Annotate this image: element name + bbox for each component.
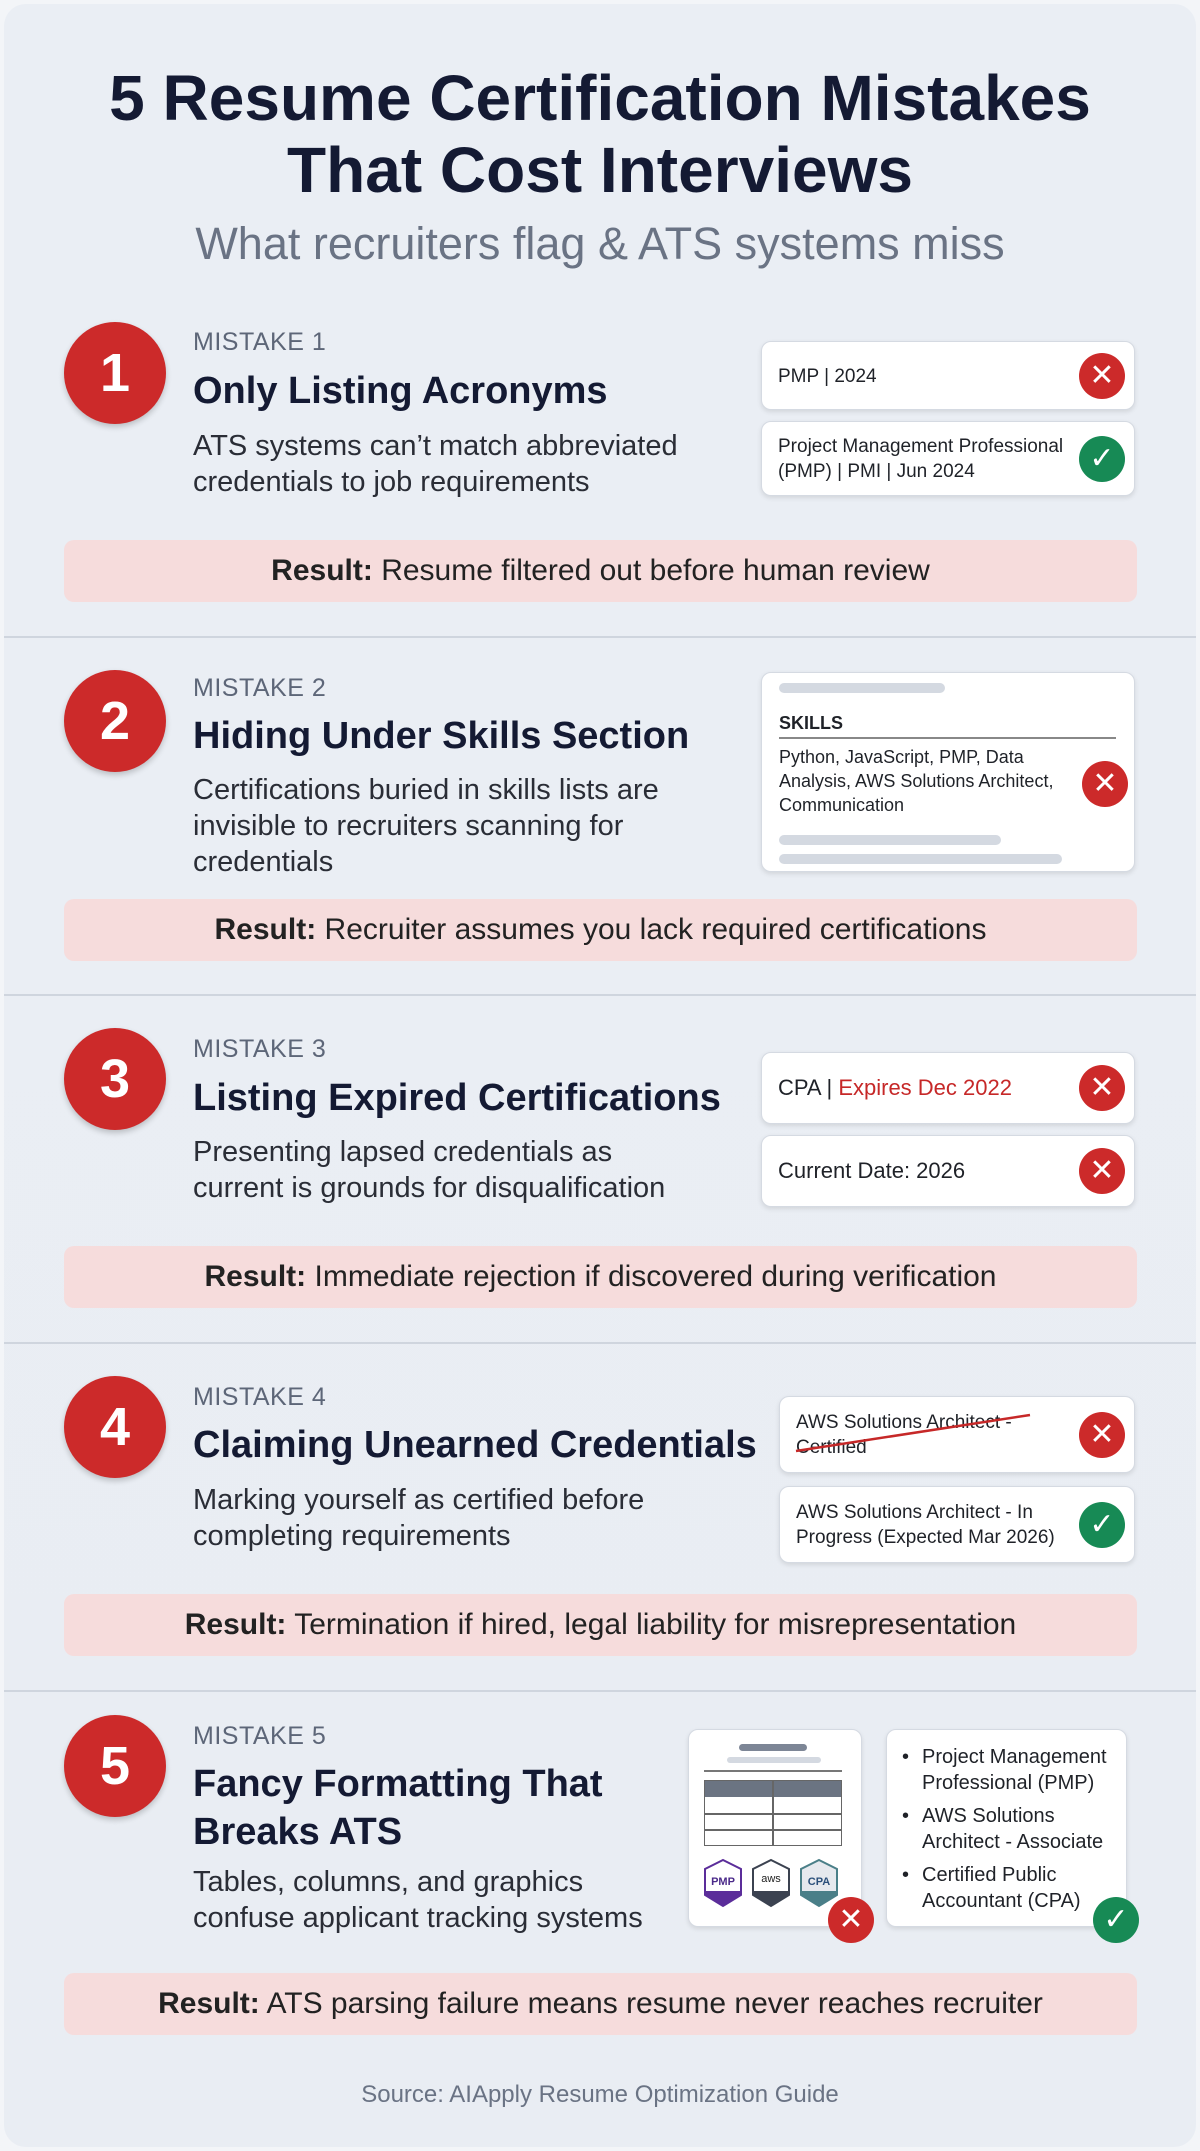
card: fancy table resume [688,1729,862,1927]
result bar [64,1973,1137,2035]
heading: Claiming Unearned Credentials [193,1424,757,1466]
card: clean list: AWS Solutions [922,1805,1055,1827]
card: struck credential: AWS Solutions Architect - [796,1412,1012,1433]
result bar: Result: Resume filtered out before human review [271,554,930,587]
source footer: Source: AIApply Resume Optimization Guide [361,2081,839,2108]
card: clean list: • [902,1746,909,1768]
card: expired: CPA | Expires Dec 2022 [778,1075,1012,1100]
description: confuse applicant tracking systems [193,1902,643,1934]
number badge 3: 3 [100,1049,130,1109]
description: Marking yourself as certified before [193,1484,644,1516]
heading: Only Listing Acronyms [193,370,608,412]
title: 5 Resume Certification Mistakes [109,62,1091,134]
card: struck credential [779,1396,1135,1473]
number badge 2 [64,670,166,772]
panel: mistake 2 [62,670,1137,961]
number badge 3 [64,1028,166,1130]
heading: Hiding Under Skills Section [193,715,689,757]
card: in progress: AWS Solutions Architect - In [796,1502,1033,1523]
result bar [64,1594,1137,1656]
card: current date: ✕ [1089,1154,1115,1187]
number badge 1 [64,322,166,424]
icon: badges [704,1858,838,1908]
description: ATS systems can’t match abbreviated [193,430,678,462]
card: expired [761,1052,1135,1124]
description: Tables, columns, and graphics [193,1866,583,1898]
result bar: Result: Immediate rejection if discovered during verification [204,1260,996,1293]
description [193,430,678,498]
heading: Listing Expired Certifications [193,1077,721,1119]
icon: x: ✕ [838,1903,864,1936]
card: current date: Current Date: 2026 [778,1158,965,1183]
description [193,1484,644,1552]
title: That Cost Interviews [287,134,913,206]
result bar [64,540,1137,602]
card: skills section: SKILLS [779,713,843,733]
icon: check [1093,1897,1139,1943]
description: credentials to job requirements [193,466,590,498]
card: struck credential: ✕ [1089,1418,1115,1451]
card: struck credential: Certified [796,1437,867,1458]
description: Presenting lapsed credentials as [193,1136,612,1168]
icon: check: ✓ [1103,1903,1129,1936]
card: skills section: Python, JavaScript, PMP, Data [779,747,1024,767]
description: completing requirements [193,1520,511,1552]
number badge 5: 5 [100,1736,130,1796]
panel: mistake 1 [62,322,1137,602]
card: skills section [761,672,1135,872]
panel: mistake 3 [62,1028,1137,1308]
icon: x [828,1897,874,1943]
icon: badges: aws [761,1873,781,1885]
number badge 4 [64,1376,166,1478]
card: in progress: Progress (Expected Mar 2026) [796,1527,1055,1548]
card: in progress: ✓ [1089,1508,1115,1541]
card: clean list: Accountant (CPA) [922,1890,1081,1912]
description: invisible to recruiters scanning for [193,810,623,842]
card: in progress [779,1486,1135,1563]
icon: x [1082,761,1128,807]
description [193,1136,665,1204]
number badge 1: 1 [100,343,130,403]
card: wrong example: ✕ [1089,359,1115,392]
heading: Fancy Formatting That [193,1763,603,1805]
card: clean list: Professional (PMP) [922,1772,1094,1794]
number badge 5 [64,1715,166,1817]
card: clean list: Project Management [922,1746,1107,1768]
result bar: Result: Recruiter assumes you lack required certifications [215,913,986,946]
label: MISTAKE 1 [193,328,326,356]
card: current date [761,1135,1135,1207]
card: correct example: (PMP) | PMI | Jun 2024 [778,461,975,482]
panel: mistake 5 [62,1715,1139,2035]
description: Certifications buried in skills lists are [193,774,659,806]
card: correct example [761,421,1135,496]
description [193,1866,643,1934]
number badge 4: 4 [100,1397,130,1457]
card: correct example: ✓ [1089,442,1115,475]
card: clean list: Architect - Associate [922,1831,1103,1853]
card: wrong example: PMP | 2024 [778,366,877,387]
label: MISTAKE 4 [193,1383,326,1411]
label: MISTAKE 5 [193,1722,326,1750]
card: clean list [886,1729,1127,1927]
result bar: Result: ATS parsing failure means resume never reaches recruiter [158,1987,1043,2020]
icon: badges: CPA [808,1876,830,1888]
result bar [64,899,1137,961]
card: clean list: • [902,1805,909,1827]
title [109,62,1091,206]
result bar: Result: Termination if hired, legal liability for misrepresentation [185,1608,1016,1641]
heading [193,1763,603,1853]
card: skills section: Analysis, AWS Solutions Architect, [779,771,1053,791]
label: MISTAKE 2 [193,674,326,702]
card: expired: ✕ [1089,1071,1115,1104]
panel: mistake 4 [62,1376,1137,1656]
subtitle: What recruiters flag & ATS systems miss [195,218,1005,269]
number badge 2: 2 [100,691,130,751]
description: current is grounds for disqualification [193,1172,665,1204]
heading: Breaks ATS [193,1811,402,1853]
card: wrong example [761,341,1135,410]
label: MISTAKE 3 [193,1035,326,1063]
icon: x: ✕ [1092,767,1118,800]
description [193,774,659,878]
description: credentials [193,846,333,878]
card: clean list: Certified Public [922,1864,1057,1886]
result bar [64,1246,1137,1308]
card: clean list: • [902,1864,909,1886]
icon: badges: PMP [711,1876,735,1888]
card: correct example: Project Management Professional [778,436,1063,457]
card: skills section: Communication [779,795,904,815]
